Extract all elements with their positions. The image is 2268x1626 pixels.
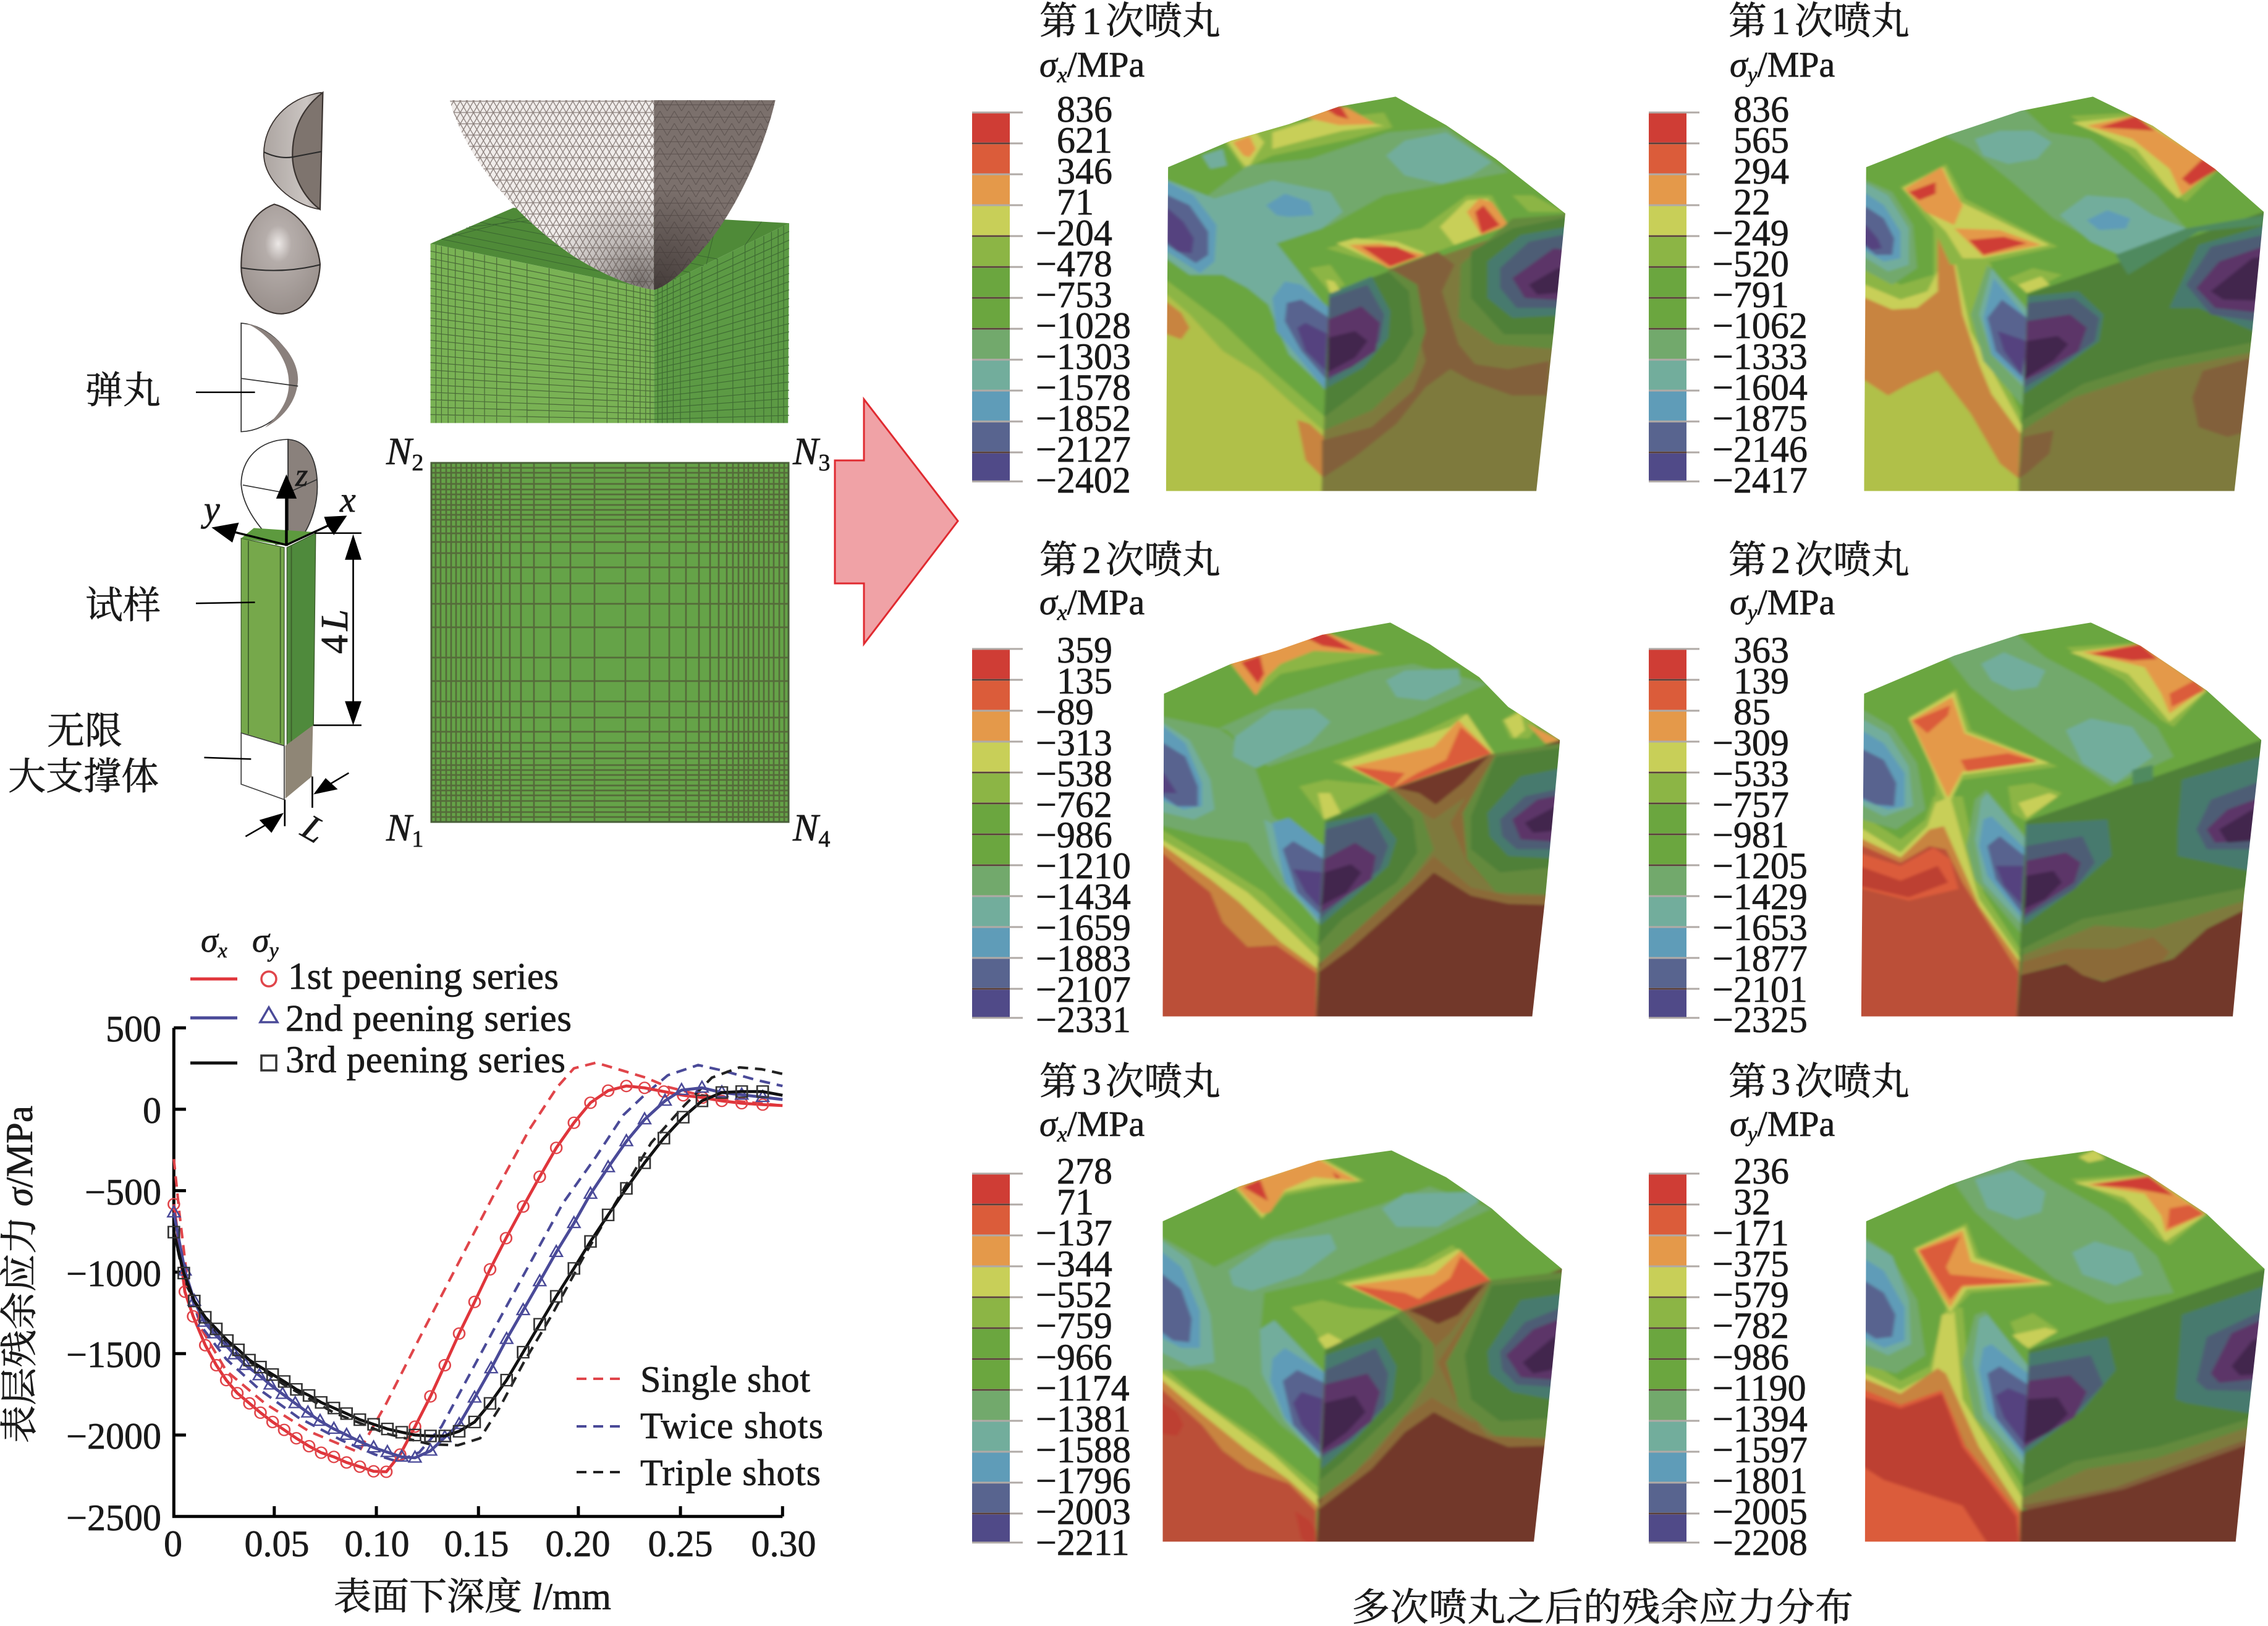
legend values: −1653: [1712, 907, 1808, 948]
heading: 第1次喷丸: [1039, 1, 1221, 43]
shot: right half in shadow: [654, 100, 776, 290]
legend: peening series: x: [218, 939, 227, 962]
legend values: −89: [1036, 692, 1094, 732]
arrow: z axis: [278, 478, 295, 546]
panel: 2nd peening sigma x: [972, 540, 1570, 1040]
legend values: −520: [1712, 243, 1789, 284]
legend values: −2005: [1712, 1491, 1808, 1532]
legend values: 236: [1733, 1151, 1789, 1192]
right face mesh: [654, 226, 789, 423]
node label N2: 2: [412, 450, 423, 476]
contour cube: [1851, 614, 2268, 1025]
legend values: −1210: [1036, 845, 1131, 886]
legend values: 71: [1057, 1182, 1094, 1222]
legend values: −478: [1036, 243, 1112, 284]
legend: peening series: 2nd peening series: [286, 998, 572, 1040]
legend: peening series: y: [268, 939, 279, 962]
node label N1: N: [386, 807, 412, 849]
legend: peening series: [190, 921, 572, 1081]
unit label: /MPa: [1067, 582, 1145, 622]
legend values: −1883: [1036, 938, 1131, 979]
legend values: −1877: [1712, 938, 1808, 979]
icon: half shot 1: [264, 93, 323, 210]
legend values: −986: [1036, 815, 1112, 855]
y axis tick labels: −1000: [66, 1253, 161, 1294]
arrowheads of L: [260, 778, 338, 833]
node label N4: N: [793, 807, 818, 849]
unit label: σ: [1039, 1104, 1059, 1144]
cube top face: [431, 208, 789, 290]
icon: half shot 2: [241, 323, 298, 432]
legend values: −1394: [1712, 1399, 1808, 1439]
y axis tick labels: 500: [106, 1009, 161, 1049]
y axis tick labels: 0: [143, 1090, 161, 1131]
label: 试样: 试样: [85, 585, 161, 627]
colour legend bar: [1649, 1174, 1699, 1543]
x axis tick labels: 0.30: [751, 1523, 816, 1564]
node label N4: 4: [818, 826, 830, 852]
label: 无限: 无限: [47, 711, 122, 752]
legend values: −2127: [1036, 429, 1131, 470]
legend values: 621: [1057, 120, 1112, 161]
legend values: −249: [1712, 213, 1789, 253]
unit label: x: [1057, 62, 1067, 87]
contour cube: [1855, 86, 2268, 500]
panel: mesh cross section: [386, 431, 830, 852]
legend values: 71: [1057, 182, 1094, 222]
legend values: −1205: [1712, 845, 1808, 886]
legend values: 565: [1733, 120, 1789, 161]
shot: left half with triangular mesh: [450, 100, 654, 290]
x axis tick labels: 0.10: [345, 1523, 409, 1564]
legend values: −538: [1036, 753, 1112, 794]
legend values: −1174: [1036, 1368, 1130, 1408]
arrow: x axis: [286, 517, 345, 545]
unit label: σ: [1039, 582, 1059, 622]
panel: meshed shot on specimen: [431, 100, 789, 423]
unit label: y: [1746, 1122, 1758, 1146]
heading: 第2次喷丸: [1039, 540, 1221, 582]
legend values: −2402: [1036, 460, 1131, 501]
legend values: −204: [1036, 213, 1112, 253]
unit label: /MPa: [1067, 1104, 1145, 1144]
legend: peening series: σ: [252, 921, 269, 960]
axis label z: z: [295, 458, 308, 493]
panel: 2nd peening sigma y: [1649, 540, 2268, 1040]
legend values: −375: [1712, 1243, 1789, 1284]
legend values: −753: [1036, 274, 1112, 315]
x axis tick labels: 0.20: [545, 1523, 611, 1564]
legend values: −759: [1036, 1305, 1112, 1346]
legend values: 836: [1057, 89, 1112, 130]
legend values: 32: [1733, 1182, 1771, 1222]
unit label: σ: [1730, 582, 1749, 622]
legend values: −2208: [1712, 1522, 1808, 1563]
dimension label L: L: [295, 806, 332, 851]
y axis tick labels: −1500: [66, 1334, 161, 1375]
legend values: −1381: [1036, 1399, 1131, 1439]
cube right face: [654, 223, 789, 423]
curve: 2nd peening series: [174, 1088, 782, 1458]
legend values: −1604: [1712, 367, 1808, 408]
legend values: −1597: [1712, 1429, 1808, 1470]
leader lines: [196, 392, 255, 759]
legend values: −1852: [1036, 398, 1131, 439]
legend values: [1712, 89, 1808, 501]
legend: shots: Twice shots: [640, 1405, 823, 1446]
legend: peening series: 3rd peening series: [286, 1040, 565, 1081]
contour cube: [1855, 1142, 2268, 1550]
contour cube: [1153, 1142, 1570, 1550]
y axis tick labels: −2000: [66, 1416, 161, 1457]
x axis tick labels: 0.25: [648, 1523, 713, 1564]
legend values: 294: [1733, 151, 1789, 192]
colour legend bar: [972, 112, 1023, 481]
y axis tick labels: −2500: [66, 1497, 161, 1538]
curve: single shot dashed: [174, 1063, 782, 1452]
unit label: y: [1746, 600, 1758, 625]
legend: peening series: σ: [201, 921, 218, 960]
colour legend bar: [972, 1174, 1023, 1543]
legend values: [1036, 1151, 1131, 1563]
legend values: [1712, 630, 1808, 1040]
arrowheads of 4L: [345, 534, 362, 726]
heading: 第1次喷丸: [1729, 1, 1910, 43]
node label N1: 1: [412, 826, 423, 852]
arrow: pink block arrow to results: [835, 399, 958, 644]
unit label: /MPa: [1067, 44, 1145, 85]
legend: peening series: 1st peening series: [288, 956, 559, 997]
y axis tick labels: −500: [85, 1172, 161, 1213]
unit label: /MPa: [1758, 582, 1835, 622]
legend values: −579: [1712, 1274, 1789, 1315]
panel: 3rd peening sigma y: [1649, 1061, 2268, 1563]
icon: infinite support: [241, 726, 313, 800]
colour legend bar: [1649, 649, 1699, 1018]
legend values: 22: [1733, 182, 1771, 222]
curve: 1st peening series: [174, 1086, 782, 1471]
legend values: −1190: [1712, 1368, 1806, 1408]
legend values: −2325: [1712, 999, 1808, 1040]
curve: triple shots dashed: [174, 1067, 782, 1446]
legend values: −782: [1712, 1305, 1789, 1346]
x axis title: 表面下深度 l/mm: [334, 1577, 611, 1618]
panel: 1st peening sigma x: [972, 1, 1578, 501]
model drawing: [196, 93, 362, 836]
y axis title: 表层残余应力 σ/MPa: [0, 1106, 41, 1443]
legend values: 359: [1057, 630, 1112, 671]
contour cube: [1153, 614, 1570, 1025]
legend values: −2107: [1036, 969, 1131, 1010]
node label N3: 3: [818, 450, 830, 476]
axis label y: y: [201, 489, 220, 529]
legend values: −1429: [1712, 876, 1808, 917]
x axis tick labels: 0.05: [245, 1523, 309, 1564]
legend values: −2417: [1712, 460, 1808, 501]
x axis tick labels: 0.15: [444, 1523, 509, 1564]
legend values: 139: [1733, 661, 1789, 701]
dimension: 4L: [313, 533, 362, 726]
legend values: 278: [1057, 1151, 1112, 1192]
icon: whole shot: [241, 204, 320, 314]
left face mesh: [431, 245, 654, 423]
legend values: −2003: [1036, 1491, 1131, 1532]
dimension: L: [245, 773, 349, 836]
x axis tick labels: 0: [164, 1523, 182, 1564]
x axis tick labels: [164, 1523, 816, 1564]
unit label: σ: [1730, 1104, 1749, 1144]
heading: 第3次喷丸: [1039, 1061, 1221, 1103]
legend values: −1333: [1712, 336, 1808, 377]
unit label: /MPa: [1758, 44, 1835, 85]
legend values: −1796: [1036, 1460, 1131, 1501]
legend values: −2211: [1036, 1522, 1130, 1563]
legend values: −1303: [1036, 336, 1131, 377]
panel: 1st peening sigma y: [1649, 1, 2268, 501]
unit label: x: [1057, 600, 1067, 625]
legend values: −313: [1036, 722, 1112, 763]
legend values: −137: [1036, 1213, 1112, 1253]
mesh square: [431, 463, 789, 822]
legend values: −1801: [1712, 1460, 1808, 1501]
heading: 第2次喷丸: [1729, 540, 1910, 582]
axes: [174, 1028, 782, 1517]
legend values: 836: [1733, 89, 1789, 130]
legend values: 346: [1057, 151, 1112, 192]
icon: specimen column: [241, 528, 316, 746]
legend values: −2331: [1036, 999, 1131, 1040]
legend: shots: [577, 1359, 823, 1493]
plot area: [174, 1028, 782, 1517]
legend values: 363: [1733, 630, 1789, 671]
legend values: −1578: [1036, 367, 1131, 408]
legend values: [1036, 89, 1131, 501]
legend values: −981: [1712, 815, 1789, 855]
unit label: /MPa: [1758, 1104, 1835, 1144]
legend values: −986: [1712, 1337, 1789, 1378]
legend values: [1712, 1151, 1808, 1563]
legend values: −1028: [1036, 305, 1131, 346]
unit label: y: [1746, 62, 1758, 87]
legend: shots: Single shot: [640, 1359, 810, 1400]
legend values: −2146: [1712, 429, 1808, 470]
legend values: [1036, 630, 1131, 1040]
legend values: −1588: [1036, 1429, 1131, 1470]
legend values: −1434: [1036, 876, 1131, 917]
unit label: x: [1057, 1122, 1067, 1146]
panel: 3rd peening sigma x: [972, 1061, 1570, 1563]
node label N3: N: [793, 431, 818, 473]
mesh cube and shot: [431, 100, 789, 423]
curve: 3rd peening series: [174, 1091, 782, 1436]
unit label: σ: [1730, 44, 1749, 85]
legend values: 135: [1057, 661, 1112, 701]
axis label x: x: [339, 480, 356, 520]
panel: residual stress line chart: [0, 921, 823, 1618]
legend values: −344: [1036, 1243, 1112, 1284]
label: 大支撑体: 大支撑体: [8, 756, 159, 798]
colour legend bar: [972, 649, 1023, 1018]
label: 弹丸: 弹丸: [85, 370, 161, 412]
legend values: −171: [1712, 1213, 1789, 1253]
legend values: −762: [1036, 784, 1112, 825]
arrow: y axis: [214, 524, 286, 545]
panel: exploded model of shot and specimen: [8, 93, 362, 851]
legend values: −2101: [1712, 969, 1808, 1010]
legend: shots: Triple shots: [640, 1452, 821, 1493]
legend values: −552: [1036, 1274, 1112, 1315]
icon: shot above specimen: [241, 439, 317, 544]
legend values: −757: [1712, 784, 1789, 825]
legend values: −309: [1712, 722, 1789, 763]
legend values: −1875: [1712, 398, 1808, 439]
curve: twice shots dashed: [174, 1065, 782, 1462]
legend values: −966: [1036, 1337, 1112, 1378]
heading: 第3次喷丸: [1729, 1061, 1910, 1103]
colour legend bar: [1649, 112, 1699, 481]
y axis tick labels: [66, 1009, 161, 1538]
cube left face: [431, 243, 654, 423]
dimension label 4L: 4L: [314, 609, 356, 654]
legend values: −533: [1712, 753, 1789, 794]
legend values: 85: [1733, 692, 1771, 732]
top face mesh: [441, 210, 761, 285]
node label N2: N: [386, 431, 412, 473]
unit label: σ: [1039, 44, 1059, 85]
legend values: −1659: [1036, 907, 1131, 948]
legend values: −1062: [1712, 305, 1808, 346]
contour cube: [1156, 86, 1578, 500]
legend values: −791: [1712, 274, 1789, 315]
